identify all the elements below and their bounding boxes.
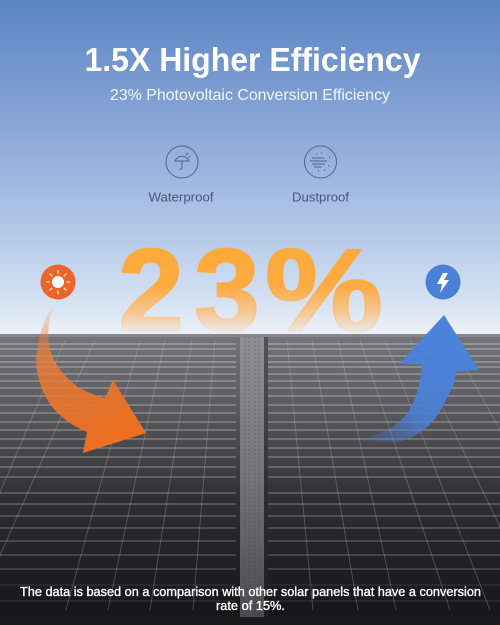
faint lower cell lines [0,585,500,601]
footnote [20,584,481,613]
big number 23%: % [265,225,383,357]
arrow: blue up [360,315,479,442]
big number 23%: 3 [194,225,260,357]
footnote: The data is based on a comparison with other solar panels that have a conversion [20,584,481,599]
icon: sun [40,264,76,300]
arrow: orange down [36,305,146,453]
icon: waterproof umbrella [166,146,198,178]
icon: lightning bolt [426,264,460,300]
panel hinge [240,337,268,625]
subtitle: 23% Photovoltaic Conversion Efficiency [110,87,390,104]
label: waterproof: Waterproof [148,190,214,204]
solar panel [0,334,500,625]
horizontal cell lines, left panel [0,344,236,569]
big number 23%: 2 [118,225,184,357]
footnote: rate of 15%. [216,598,285,613]
big number 23% [118,225,383,357]
title: 1.5X Higher Efficiency [84,41,421,78]
bottom band [0,617,500,625]
sky background [0,0,500,336]
vertical cell lines [0,340,500,610]
icon: dustproof wind [304,146,336,178]
horizontal cell lines, right panel [268,344,500,569]
label: dustproof: Dustproof [292,190,349,204]
